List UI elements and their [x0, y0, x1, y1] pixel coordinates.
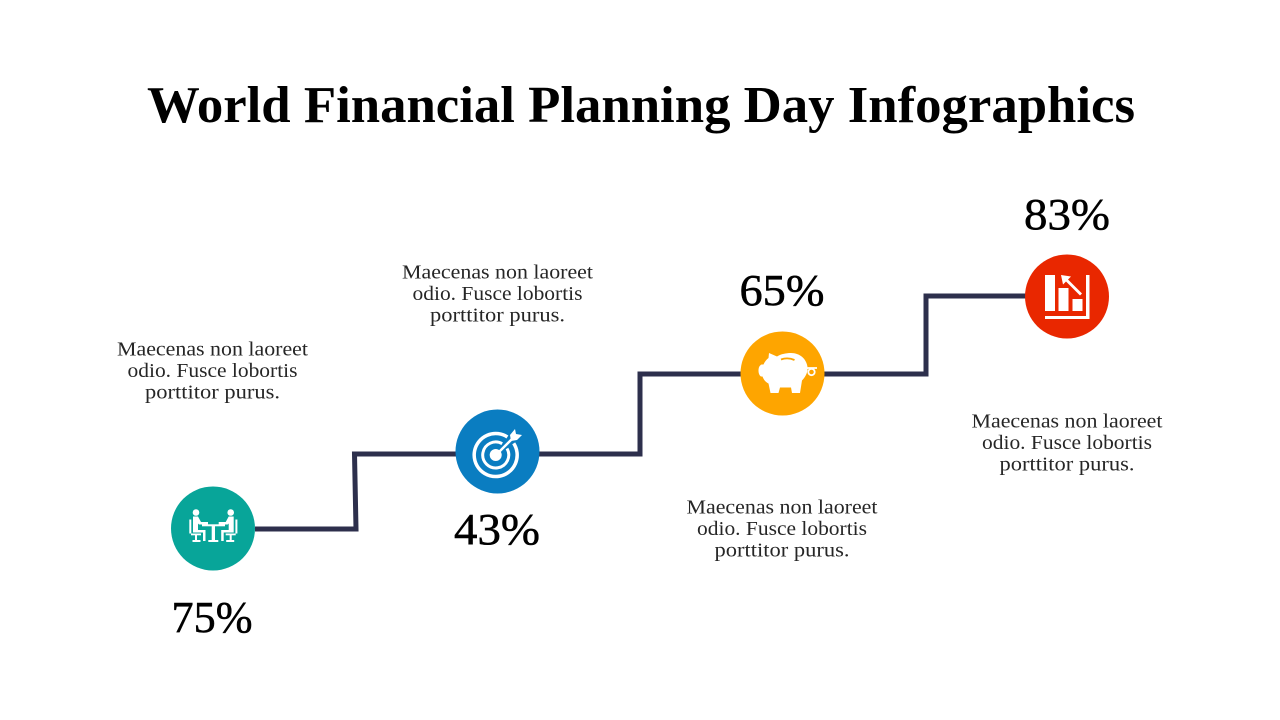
stepped connector line — [255, 296, 1027, 529]
description: Maecenas non laoreet — [402, 262, 593, 284]
description: porttitor purus. — [714, 540, 850, 562]
description: porttitor purus. — [145, 382, 280, 404]
icon: target with arrow — [456, 410, 540, 494]
step 1: teal meeting — [117, 338, 308, 642]
description: odio. Fusce lobortis — [697, 518, 867, 540]
description: porttitor purus. — [430, 304, 565, 326]
icon: bar chart with arrow — [1025, 254, 1109, 338]
percentage: 65% — [740, 266, 824, 315]
step 3: orange piggy bank — [686, 266, 878, 562]
description: odio. Fusce lobortis — [982, 432, 1152, 454]
percentage: 75% — [172, 593, 252, 642]
description: Maecenas non laoreet — [117, 338, 308, 360]
description: Maecenas non laoreet — [686, 496, 878, 518]
description: odio. Fusce lobortis — [412, 283, 583, 305]
step 2: blue target — [402, 262, 593, 554]
title: World Financial Planning Day Infographics — [147, 77, 1135, 134]
description: Maecenas non laoreet — [972, 410, 1163, 432]
icon: piggy bank — [740, 332, 824, 416]
description: odio. Fusce lobortis — [128, 360, 298, 382]
percentage: 43% — [454, 505, 540, 554]
percentage: 83% — [1024, 190, 1110, 239]
step 4: red chart — [972, 190, 1163, 476]
description: porttitor purus. — [1000, 454, 1134, 476]
icon: meeting at table — [171, 486, 255, 570]
